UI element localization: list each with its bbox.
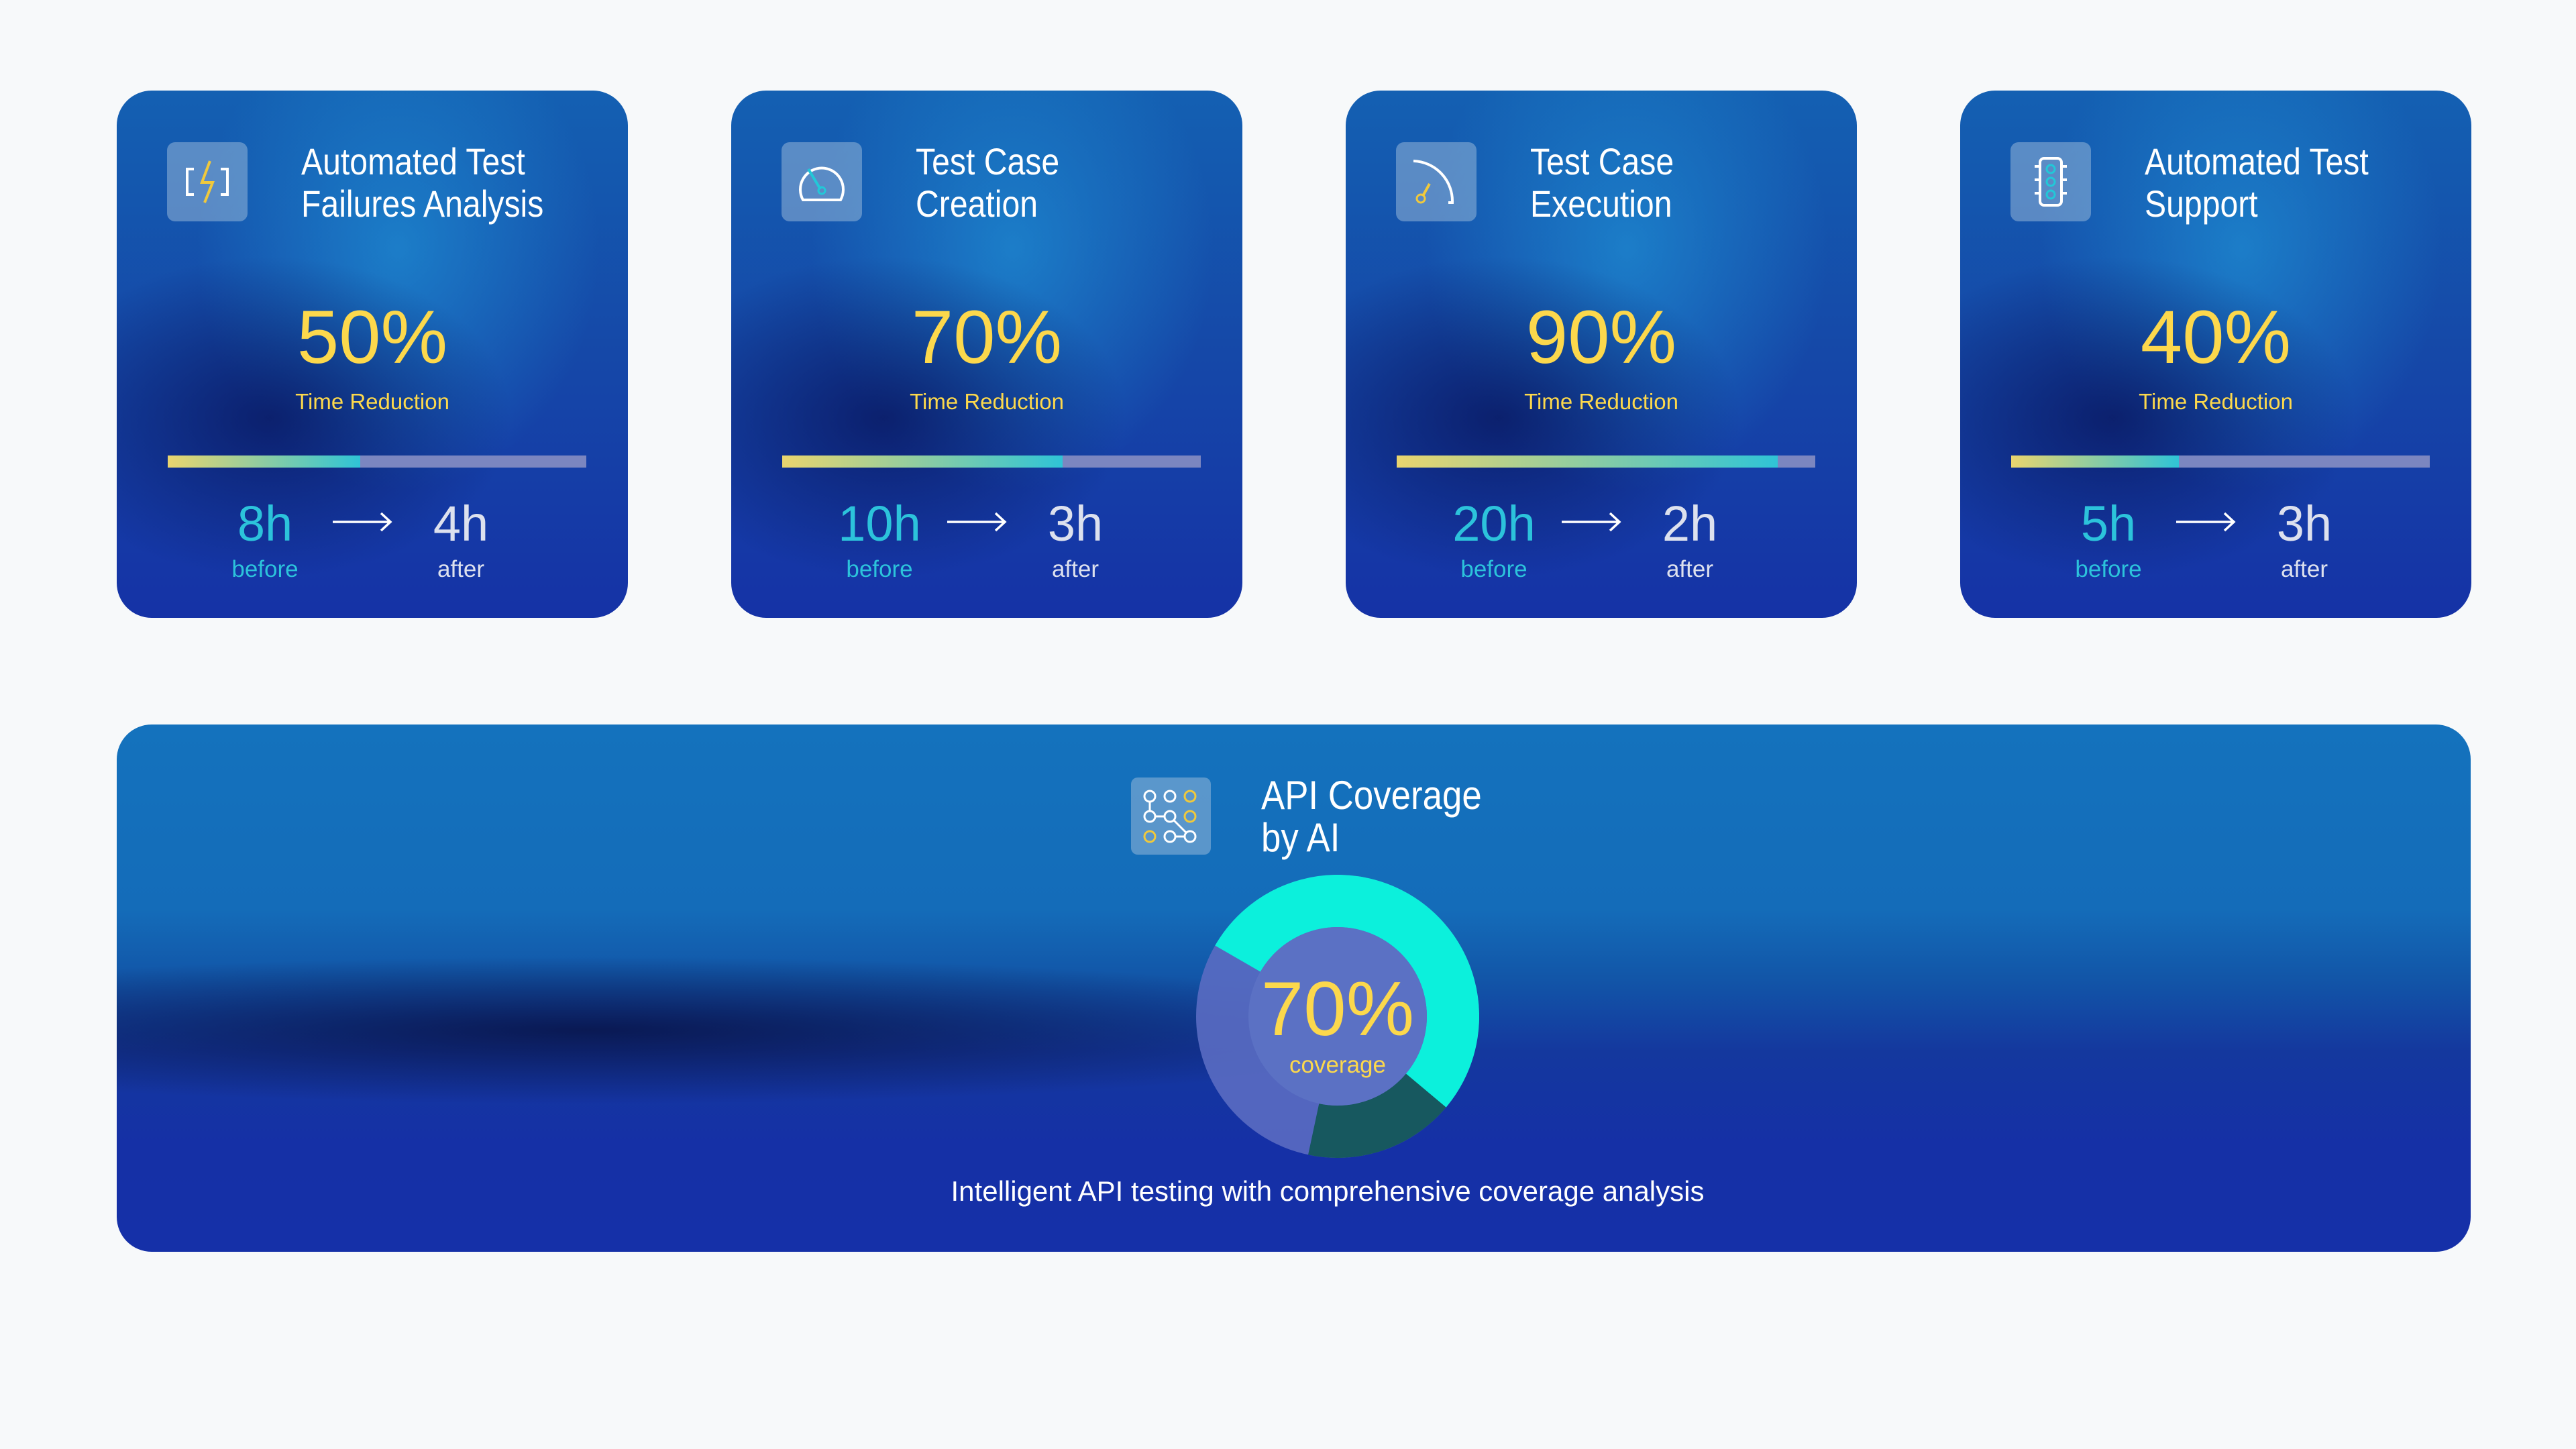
title: Automated Test <box>301 140 525 182</box>
card: test case execution <box>1346 91 1857 618</box>
after value: 2h <box>1662 496 1717 551</box>
before label: before <box>1460 556 1527 582</box>
label: Time Reduction <box>1524 389 1678 414</box>
percentage: 40% <box>2141 295 2291 379</box>
card: test case creation <box>731 91 1242 618</box>
icon: gauge <box>1396 142 1477 221</box>
after value: 4h <box>433 496 488 551</box>
title <box>1530 140 1674 225</box>
after value: 3h <box>2277 496 2332 551</box>
arrow <box>333 513 392 531</box>
label: Time Reduction <box>295 389 449 414</box>
card: automated test failures analysis <box>117 91 628 618</box>
donut value: 70% <box>1261 967 1414 1052</box>
donut chart <box>1196 875 1479 1158</box>
title <box>1261 773 1482 860</box>
label: Time Reduction <box>910 389 1064 414</box>
title: by AI <box>1261 815 1340 860</box>
before value: 5h <box>2081 496 2136 551</box>
progress bar <box>168 455 586 468</box>
caption: Intelligent API testing with comprehensive coverage analysis <box>951 1175 1704 1207</box>
title: API Coverage <box>1261 773 1482 818</box>
title: Test Case <box>1530 140 1674 182</box>
title <box>301 140 543 225</box>
title: Automated Test <box>2145 140 2369 182</box>
donut label: coverage <box>1289 1052 1386 1078</box>
title: Test Case <box>916 140 1059 182</box>
after label: after <box>437 556 484 582</box>
arrow <box>1562 513 1621 531</box>
percentage: 90% <box>1526 295 1676 379</box>
progress bar <box>782 455 1201 468</box>
title <box>916 140 1059 225</box>
progress bar <box>1397 455 1815 468</box>
percentage: 50% <box>297 295 447 379</box>
label: Time Reduction <box>2139 389 2293 414</box>
title <box>2145 140 2369 225</box>
title: Failures Analysis <box>301 182 543 225</box>
title: Support <box>2145 182 2258 225</box>
after value: 3h <box>1048 496 1103 551</box>
icon: speedometer <box>782 142 862 221</box>
percentage: 70% <box>912 295 1062 379</box>
card: automated test support <box>1960 91 2471 618</box>
before label: before <box>846 556 913 582</box>
panel: api coverage <box>117 724 2471 1252</box>
title: Execution <box>1530 182 1672 225</box>
progress bar <box>2011 455 2430 468</box>
arrow <box>947 513 1006 531</box>
before value: 20h <box>1452 496 1536 551</box>
title: Creation <box>916 182 1038 225</box>
icon: network grid <box>1131 777 1211 855</box>
before value: 8h <box>237 496 292 551</box>
before label: before <box>2075 556 2142 582</box>
icon: lightning <box>167 142 248 221</box>
before value: 10h <box>838 496 921 551</box>
after label: after <box>1052 556 1099 582</box>
icon: traffic light <box>2010 142 2091 221</box>
after label: after <box>2281 556 2328 582</box>
arrow <box>2176 513 2235 531</box>
after label: after <box>1666 556 1713 582</box>
before label: before <box>231 556 299 582</box>
